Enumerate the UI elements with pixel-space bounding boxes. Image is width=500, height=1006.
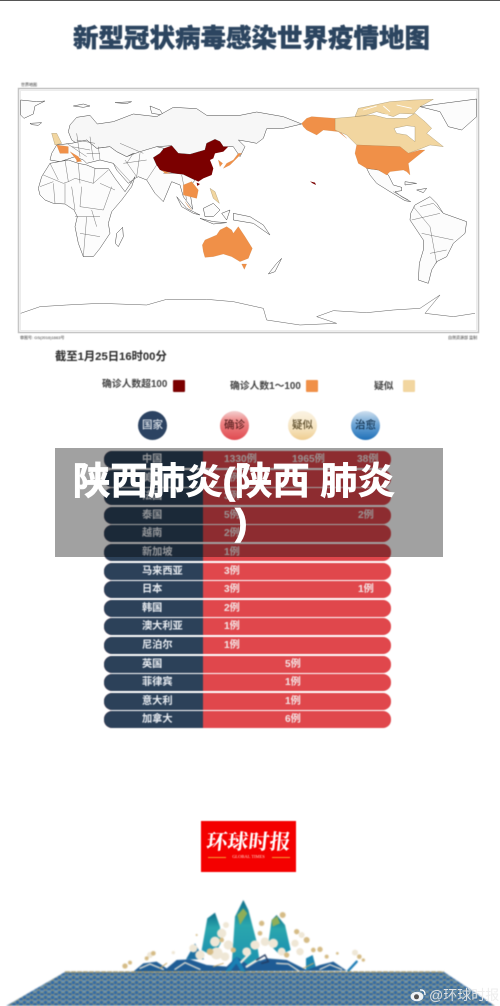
illustration: mountains and waves [6, 900, 496, 1006]
map approval number: 审图号: GS(2016)1663号 [20, 335, 64, 340]
overlay banner [55, 448, 443, 557]
column header: suspected: 疑似 [292, 419, 313, 431]
banner headline line 1: 陕西肺炎(陕西 肺炎 [73, 460, 395, 502]
row: USA: 2例 [224, 473, 240, 484]
row: Canada: 加拿大 [142, 714, 173, 725]
legend: 1 to 100 [230, 379, 319, 393]
row: Italy [104, 693, 391, 710]
row: Canada: 6例 [285, 714, 301, 725]
row: Thailand: 2例 [358, 510, 374, 521]
row: Thailand [104, 507, 391, 524]
column header: confirmed [220, 411, 249, 440]
logo: Global Times: GLOBAL TIMES [232, 854, 265, 859]
row: Vietnam [104, 525, 391, 542]
row: South Korea: 韩国 [142, 603, 162, 614]
country: Canada (suspected) [52, 99, 443, 203]
row: Singapore: 1例 [224, 547, 240, 558]
row: Japan: 1例 [358, 584, 374, 595]
row: South Korea [104, 600, 391, 617]
row: Japan: 日本 [142, 584, 162, 595]
row: UK: 5例 [285, 659, 301, 670]
row: Italy: 1例 [285, 696, 301, 707]
legend: suspected: 疑似 [374, 381, 394, 392]
column header: confirmed: 确诊 [224, 419, 245, 431]
base land outlines [21, 99, 477, 283]
row: China: 1330例 [224, 454, 257, 465]
row: Thailand: 5例 [224, 510, 240, 521]
row: Nepal: 1例 [224, 640, 240, 651]
title: 新型冠状病毒感染世界疫情地图 [73, 25, 430, 53]
column header: cured: 治愈 [355, 419, 376, 431]
row: Nepal [104, 637, 391, 654]
blue wave base [133, 957, 347, 972]
map source: 自然资源部 监制 [448, 335, 477, 340]
logo: Global Times: 环球时报 [205, 830, 292, 854]
row: China [104, 451, 391, 468]
legend: suspected [374, 380, 416, 392]
weibo watermark: @环球时报 [429, 987, 499, 1003]
row: UK: 英国 [142, 659, 162, 670]
row: Thailand: 泰国 [142, 510, 162, 521]
row: Australia: 1例 [224, 621, 240, 632]
country: USA, Alaska (1-100) [57, 117, 425, 269]
row: Nepal: 尼泊尔 [142, 640, 173, 651]
icon: weibo [410, 989, 426, 1002]
country: China (over 100) [153, 139, 316, 186]
legend: over 100 [102, 378, 186, 393]
row: Canada [104, 711, 391, 728]
row: France: 法国 [142, 491, 162, 502]
map caption: 世界地图 [21, 82, 37, 87]
row: Singapore: 新加坡 [142, 547, 173, 558]
world map panel [18, 88, 480, 334]
legend: over 100: 确诊人数超100 [102, 379, 167, 390]
row: Australia: 澳大利亚 [142, 621, 183, 632]
legend: 1 to 100: 确诊人数1～100 [230, 381, 301, 392]
banner headline line 2: ) [235, 501, 247, 543]
row: Italy: 意大利 [142, 696, 173, 707]
row: France: 3例 [224, 491, 240, 502]
row: China: 1965例 [292, 454, 325, 465]
case table [103, 450, 392, 729]
row: Singapore [104, 544, 391, 561]
column header: country [138, 411, 167, 440]
row: Japan [104, 581, 391, 598]
row: Malaysia [104, 563, 391, 580]
row: Malaysia: 马来西亚 [142, 566, 183, 577]
timestamp: 截至1月25日16时00分 [55, 351, 167, 363]
column header: cured [351, 411, 380, 440]
column header: country: 国家 [142, 419, 163, 431]
foam and surf [147, 922, 358, 961]
column header: suspected [288, 411, 317, 440]
row: Vietnam: 2例 [224, 528, 240, 539]
row: Vietnam: 越南 [142, 528, 162, 539]
row: Philippines: 菲律宾 [142, 677, 173, 688]
mountains [122, 900, 365, 972]
internal borders [40, 133, 453, 263]
row: Australia [104, 618, 391, 635]
row: Japan: 3例 [224, 584, 240, 595]
logo: Global Times [201, 821, 296, 872]
row: China: 38例 [357, 454, 379, 465]
wave field [6, 972, 495, 1006]
row: France [104, 488, 391, 505]
row: USA: 美国 [142, 473, 162, 484]
row: Philippines: 1例 [285, 677, 301, 688]
row: USA [104, 470, 391, 487]
row: UK [104, 656, 391, 673]
row: South Korea: 2例 [224, 603, 240, 614]
row: Philippines [104, 674, 391, 691]
row: China: 中国 [142, 454, 162, 465]
row: Malaysia: 3例 [224, 566, 240, 577]
